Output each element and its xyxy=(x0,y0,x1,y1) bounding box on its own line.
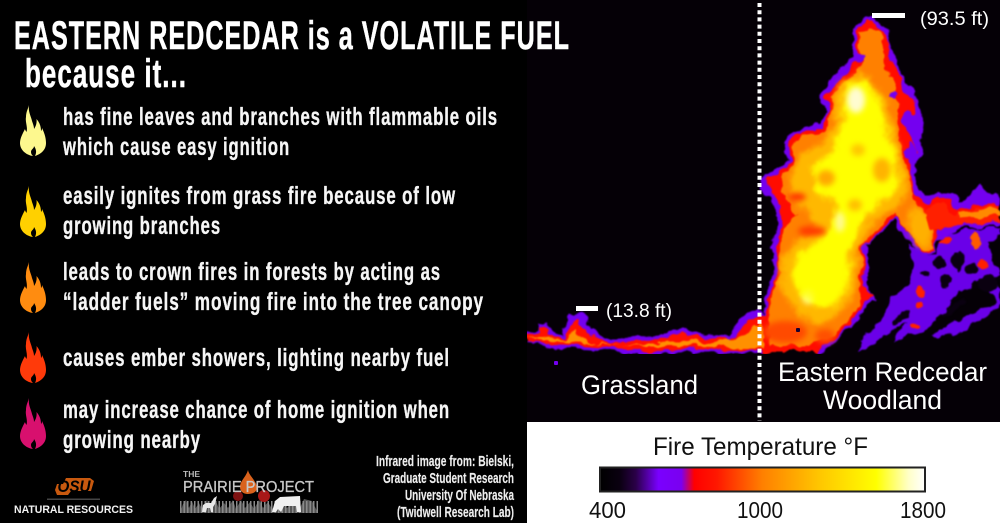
logo: The Prairie Project xyxy=(180,469,318,513)
cow xyxy=(272,496,301,512)
reason 3 text xyxy=(63,258,484,316)
reason 4 text: causes ember showers, lighting nearby fuel xyxy=(63,344,450,372)
panel: temperature legend xyxy=(527,422,1000,523)
OSU mark: OSU xyxy=(58,477,91,496)
image credit xyxy=(376,454,515,521)
ember gaps xyxy=(890,254,996,327)
reason 3 text: “ladder fuels” moving fire into the tree canopy xyxy=(63,288,484,316)
logo wordmark: PRAIRIE PROJECT xyxy=(183,479,314,496)
height marker: grassland: (13.8 ft) xyxy=(606,301,672,322)
red layer xyxy=(761,23,1000,352)
grass strip xyxy=(180,498,318,513)
title: EASTERN REDCEDAR is a VOLATILE FUEL xyxy=(14,14,570,58)
violet flecks inside the flame xyxy=(852,52,915,158)
title xyxy=(14,14,570,96)
scale labels xyxy=(589,497,946,523)
icon: pale yellow flame xyxy=(20,105,46,156)
natural resources text: NATURAL RESOURCES xyxy=(14,504,133,516)
fire plumes xyxy=(527,17,1000,356)
reason 3 xyxy=(20,258,484,316)
reason 1 text: has fine leaves and branches with flammable oils xyxy=(63,103,498,131)
amber and yellow core xyxy=(780,70,932,324)
reason 5 text: growing nearby xyxy=(63,426,201,454)
reason 1 text: which cause easy ignition xyxy=(62,133,290,161)
scattered embers xyxy=(858,228,1000,352)
reason 5 xyxy=(20,396,450,454)
reason 1 text xyxy=(62,103,498,161)
reason 2 text: growing branches xyxy=(63,212,221,240)
scale labels: 1000 xyxy=(737,497,783,523)
label: eastern redcedar woodland: Woodland xyxy=(823,385,942,415)
icon: magenta flame xyxy=(20,398,46,449)
image credit: (Twidwell Research Lab) xyxy=(397,505,514,521)
colour scale bar xyxy=(600,468,925,492)
divider: dotted line xyxy=(758,3,762,421)
image credit: University Of Nebraska xyxy=(405,488,515,504)
height marker: woodland: (93.5 ft) xyxy=(920,9,989,30)
reason 5 text: may increase chance of home ignition when xyxy=(63,396,450,424)
height marker: grassland xyxy=(576,301,672,322)
scale labels: 1800 xyxy=(900,497,946,523)
panel: infrared fire image xyxy=(527,0,1000,422)
logo: OSU Natural Resources xyxy=(14,477,133,516)
reason 2 text: easily ignites from grass fire because of low xyxy=(63,182,456,210)
panel: reasons list xyxy=(20,103,498,454)
orange layer xyxy=(768,28,935,347)
reason 1 xyxy=(20,103,498,161)
legend title: Fire Temperature °F xyxy=(653,433,868,461)
image credit: Graduate Student Research xyxy=(383,471,514,487)
label: grassland: Grassland xyxy=(581,370,698,400)
reason 4 xyxy=(20,332,450,383)
icon: red flame xyxy=(20,332,46,383)
title: because it... xyxy=(25,52,187,96)
reason 2 text xyxy=(63,182,456,240)
scale labels: 400 xyxy=(589,497,626,523)
logo wordmark: THE xyxy=(183,469,200,479)
red embers xyxy=(908,230,990,328)
reason 2 xyxy=(20,182,456,240)
icon: yellow flame xyxy=(20,186,46,237)
right-hand streak xyxy=(925,203,1000,230)
grassland flame xyxy=(527,307,764,356)
label: eastern redcedar woodland xyxy=(778,357,987,415)
logo flame xyxy=(240,470,257,494)
hot spots and mottling xyxy=(763,87,891,343)
goat xyxy=(202,496,217,512)
icon: orange flame xyxy=(20,262,46,313)
image credit: Infrared image from: Bielski, xyxy=(376,454,514,470)
reason 3 text: leads to crown fires in forests by acting as xyxy=(63,258,441,286)
height marker: woodland xyxy=(872,9,989,30)
reason 5 text xyxy=(63,396,450,454)
label: eastern redcedar woodland: Eastern Redcedar xyxy=(778,357,987,387)
red drops xyxy=(233,490,270,502)
logo wordmark xyxy=(183,469,314,496)
woodland flame outer xyxy=(760,17,1000,352)
